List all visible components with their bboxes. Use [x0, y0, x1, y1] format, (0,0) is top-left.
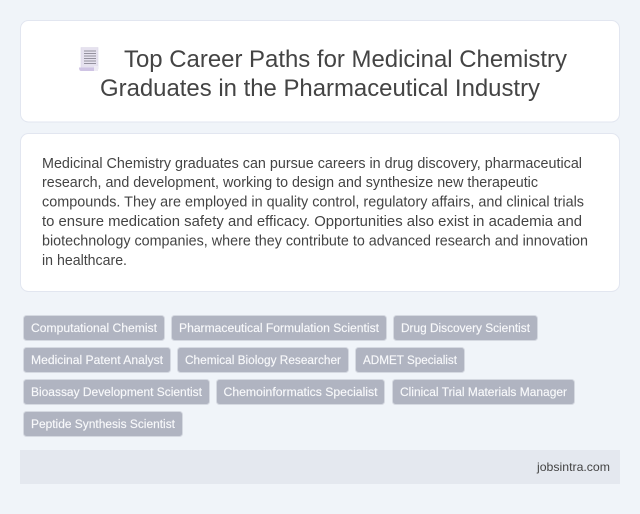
tag list: career paths [24, 316, 574, 436]
tag: Clinical Trial Materials Manager: Clinical Trial Materials Manager [400, 385, 567, 399]
tag: Peptide Synthesis Scientist [24, 412, 182, 436]
tag: ADMET Specialist: ADMET Specialist [363, 353, 458, 367]
panel: description [20, 134, 620, 292]
heading: Top Career Paths for Medicinal Chemistry [124, 46, 567, 73]
tag: Bioassay Development Scientist [24, 380, 210, 404]
tag: ADMET Specialist [356, 348, 464, 372]
footer text: source: jobsintra.com [536, 460, 610, 474]
tag: Medicinal Patent Analyst [24, 348, 170, 372]
text block: description: to ensure medication safety and efficacy. Opportunities also exist in academia and [42, 214, 582, 230]
footer bar [20, 450, 620, 484]
tag: Chemoinformatics Specialist: Chemoinformatics Specialist [224, 385, 378, 399]
tag: Computational Chemist [24, 316, 164, 340]
text block: description: Medicinal Chemistry graduates can pursue careers in drug discovery, pharmaceutical [42, 156, 582, 172]
text block: description [42, 156, 588, 269]
tag: Chemical Biology Researcher [178, 348, 348, 372]
tag: Chemoinformatics Specialist [216, 380, 384, 404]
tag: Bioassay Development Scientist: Bioassay Development Scientist [31, 385, 203, 399]
tag: Pharmaceutical Formulation Scientist [172, 316, 386, 340]
tag: Chemical Biology Researcher: Chemical Biology Researcher [185, 353, 341, 367]
heading [100, 46, 567, 102]
panel: title card [20, 20, 620, 122]
text block: description: in healthcare. [42, 253, 127, 269]
heading: Graduates in the Pharmaceutical Industry [100, 75, 540, 102]
tag: Drug Discovery Scientist: Drug Discovery Scientist [401, 321, 531, 335]
icon: document scroll [79, 48, 98, 71]
text block: description: research, and development, working to design and synthesize new therapeutic [42, 175, 538, 191]
tag: Computational Chemist: Computational Chemist [31, 321, 158, 335]
tag: Drug Discovery Scientist [394, 316, 538, 340]
tag: Medicinal Patent Analyst: Medicinal Patent Analyst [31, 353, 164, 367]
text block: description: biotechnology companies, where they contribute to advanced research and innovation [42, 234, 588, 250]
text block: description: compounds. They are employed in quality control, regulatory affairs, and clinical trials [42, 194, 584, 210]
tag: Peptide Synthesis Scientist: Peptide Synthesis Scientist [31, 417, 176, 431]
tag: Clinical Trial Materials Manager [392, 380, 574, 404]
tag: Pharmaceutical Formulation Scientist: Pharmaceutical Formulation Scientist [179, 321, 380, 335]
